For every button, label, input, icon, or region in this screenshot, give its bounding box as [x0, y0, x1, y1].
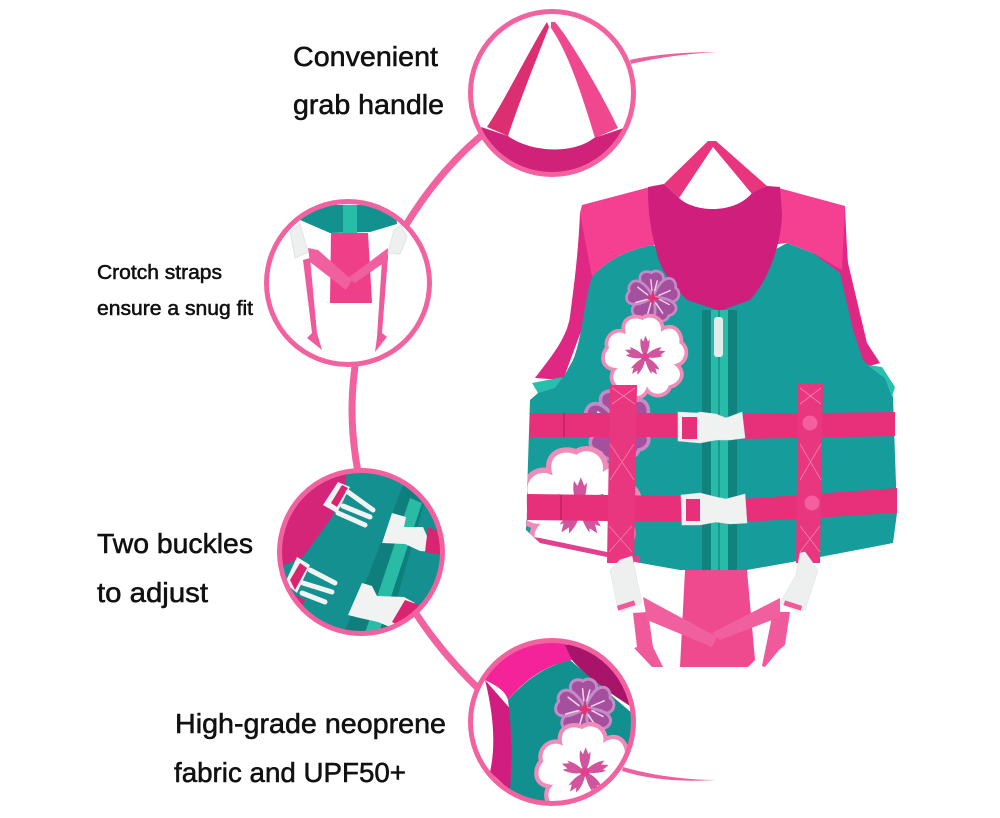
shoulder right — [770, 187, 845, 270]
lower right buckle — [348, 583, 422, 628]
label: crotch straps — [97, 262, 253, 320]
label: two buckles: Two buckles — [97, 528, 253, 559]
label: two buckles: to adjust — [97, 577, 208, 608]
lower left buckle — [285, 557, 335, 602]
neck panel — [565, 644, 630, 706]
left buckle — [290, 224, 308, 258]
right vertical strap — [796, 383, 823, 563]
strap stitching — [609, 388, 821, 552]
label: neoprene fabric: fabric and UPF50+ — [174, 757, 406, 788]
upper left buckle — [323, 482, 373, 525]
teal panel — [508, 660, 631, 801]
neck collar band — [481, 127, 624, 174]
crotch pad — [680, 570, 755, 667]
main product: life vest — [517, 141, 897, 667]
armhole trim left — [535, 213, 600, 380]
right buckle — [388, 225, 407, 254]
zipper pull — [714, 317, 723, 357]
left leg strap — [303, 258, 322, 350]
neck panel — [648, 184, 782, 311]
flower: purple — [624, 271, 681, 326]
zipper — [702, 310, 737, 570]
pink webbing — [282, 474, 346, 566]
purple flower — [554, 678, 616, 730]
grab handle — [664, 141, 767, 198]
label: neoprene fabric: High-grade neoprene — [175, 708, 446, 739]
detail circle: two buckles — [278, 470, 442, 640]
right leg strap — [375, 257, 388, 352]
connector arc linking the detail circles — [352, 125, 495, 692]
left cross strap — [643, 597, 717, 647]
crossing straps — [308, 248, 388, 290]
detail circle: crotch straps — [266, 202, 430, 364]
strap folds — [561, 413, 564, 520]
label: convenient grab handle — [293, 41, 444, 120]
label: convenient grab handle: grab handle — [293, 89, 444, 120]
right leg buckle — [780, 552, 818, 612]
armhole trim right — [800, 207, 880, 367]
right cross strap — [712, 598, 780, 640]
teal body — [526, 243, 897, 570]
zipper band — [345, 485, 424, 631]
upper waist strap — [530, 412, 895, 439]
infographic canvas — [97, 9, 897, 806]
strap snaps — [802, 416, 820, 510]
upper center buckle — [678, 412, 745, 443]
label: crotch straps: Crotch straps — [97, 262, 222, 284]
lower center buckle — [681, 493, 747, 525]
armhole trim — [485, 680, 512, 789]
callout tail: grab handle — [630, 52, 716, 64]
label: neoprene fabric — [174, 708, 446, 788]
label: crotch straps: ensure a snug fit — [97, 298, 253, 320]
left leg strap — [633, 612, 663, 667]
upper right buckle — [382, 513, 442, 555]
flower: behind top strap — [580, 390, 655, 463]
handle strap left — [487, 22, 549, 136]
handle strap right — [551, 22, 618, 138]
detail circle: grab handle — [470, 12, 634, 174]
crotch pad — [330, 233, 372, 303]
teal hem — [300, 205, 397, 233]
side tabs — [532, 365, 895, 397]
shoulder panel — [485, 640, 572, 700]
label: convenient grab handle: Convenient — [293, 41, 438, 72]
left leg buckle — [610, 556, 642, 612]
shoulder left — [580, 187, 660, 277]
left vertical strap — [607, 385, 637, 563]
lower waist strap — [527, 488, 897, 522]
right leg strap — [762, 612, 790, 667]
label: two buckles — [97, 528, 253, 608]
white flower — [534, 722, 628, 801]
detail circle: neoprene fabric — [470, 640, 640, 818]
flower: lower left, clipped to body — [517, 451, 641, 571]
flower: pink and white — [601, 318, 687, 401]
callout tail: neoprene fabric — [622, 767, 716, 781]
